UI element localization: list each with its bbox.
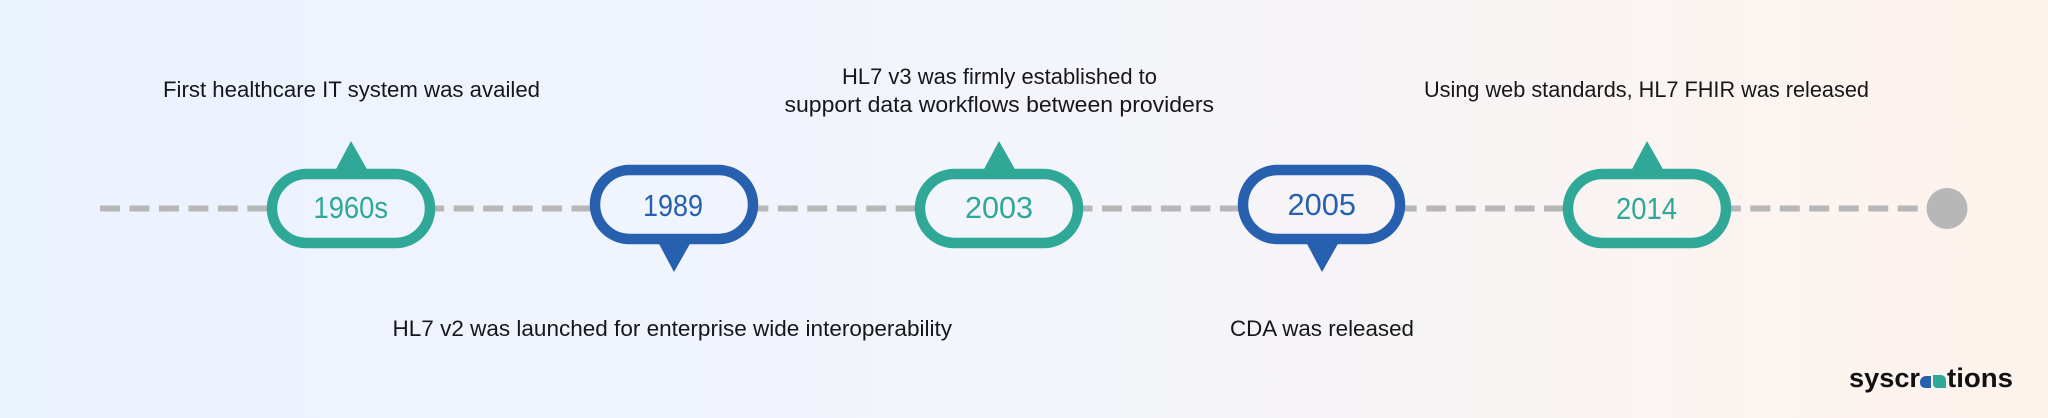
callout pill: 2014 — [1568, 141, 1726, 243]
milestone: 2005 — [1230, 170, 1414, 341]
callout pill: 2003 — [920, 141, 1078, 243]
description: 1989: HL7 v2 was launched for enterprise wide interoperability — [392, 316, 952, 341]
icon: logo speech bubble teal — [1933, 375, 1946, 388]
callout pill: 1960s — [272, 141, 430, 243]
description: 2003: HL7 v3 was firmly established to — [842, 64, 1157, 89]
callout pill: 1989 — [595, 170, 753, 272]
year: 2003: 2003 — [965, 190, 1033, 225]
end dot — [1926, 188, 1968, 229]
logo: syscreations: tions — [1947, 363, 2013, 393]
callout pill: 2005 — [1243, 170, 1400, 272]
description: 2005: CDA was released — [1230, 316, 1414, 341]
logo: syscreations: syscr — [1849, 363, 1920, 393]
year: 1960s: 1960s — [314, 190, 388, 225]
year: 2005: 2005 — [1288, 187, 1356, 222]
milestone: 1989 — [392, 170, 952, 341]
milestone: 2014 — [1424, 77, 1869, 243]
description: 2003: support data workflows between providers — [784, 92, 1214, 117]
description: 2014: Using web standards, HL7 FHIR was released — [1424, 77, 1869, 102]
icon: logo speech bubble blue — [1920, 376, 1931, 388]
milestone: 2003 — [784, 64, 1214, 243]
timeline dashed line — [100, 206, 1925, 212]
description: 1960s: First healthcare IT system was availed — [163, 77, 540, 102]
year: 2014: 2014 — [1616, 191, 1677, 226]
logo: syscreations — [1849, 363, 2013, 393]
year: 1989: 1989 — [643, 188, 703, 223]
milestone: 1960s — [163, 77, 540, 243]
